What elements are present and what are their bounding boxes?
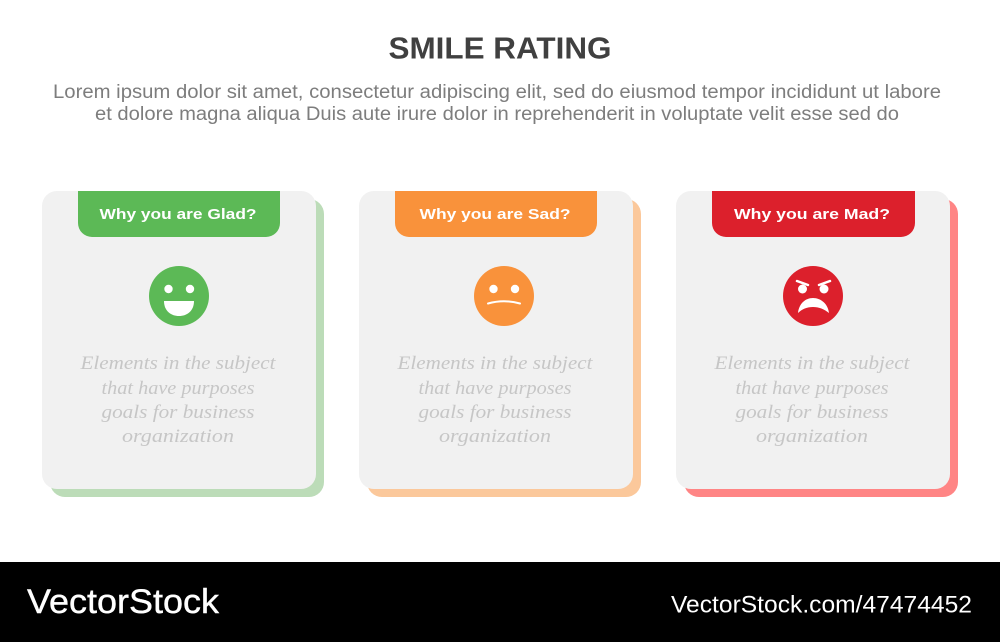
footer logo: VectorStock: [27, 583, 220, 621]
text: mad description: Elements in the subject: [713, 353, 910, 374]
intro text: et dolore magna aliqua Duis aute irure dolor in reprehenderit in voluptate velit esse sed do: [95, 104, 899, 125]
title: SMILE RATING: [388, 30, 612, 66]
text: glad description: that have purposes: [102, 378, 254, 399]
icon: sad face: [474, 266, 534, 326]
tab: glad heading: Why you are Glad?: [100, 206, 256, 223]
tab: mad heading: [712, 191, 915, 237]
text: sad description: [396, 353, 593, 447]
tab: sad heading: Why you are Sad?: [420, 206, 570, 223]
icon: angry face: [783, 266, 843, 326]
text: glad description: Elements in the subject: [79, 353, 276, 374]
footer url: VectorStock.com/47474452: [671, 592, 972, 618]
text: sad description: organization: [439, 426, 551, 447]
icon: happy face: [149, 266, 209, 326]
text: mad description: goals for business: [736, 402, 888, 423]
panel: glad: [42, 191, 324, 497]
text: sad description: goals for business: [418, 402, 572, 423]
tab: mad heading: Why you are Mad?: [734, 206, 890, 223]
panel: mad: [676, 191, 958, 497]
text: sad description: that have purposes: [418, 378, 572, 399]
text: mad description: that have purposes: [736, 378, 888, 399]
text: glad description: [79, 353, 276, 447]
text: glad description: organization: [122, 426, 234, 447]
tab: sad heading: [395, 191, 597, 237]
tab: glad heading: [78, 191, 280, 237]
intro text: Lorem ipsum dolor sit amet, consectetur adipiscing elit, sed do eiusmod tempor incididunt ut labore: [53, 82, 941, 103]
intro text: [53, 82, 941, 125]
text: sad description: Elements in the subject: [396, 353, 593, 374]
text: mad description: [713, 353, 910, 447]
text: mad description: organization: [756, 426, 868, 447]
panel: sad: [359, 191, 641, 497]
footer bar: [0, 562, 1000, 642]
text: glad description: goals for business: [102, 402, 254, 423]
